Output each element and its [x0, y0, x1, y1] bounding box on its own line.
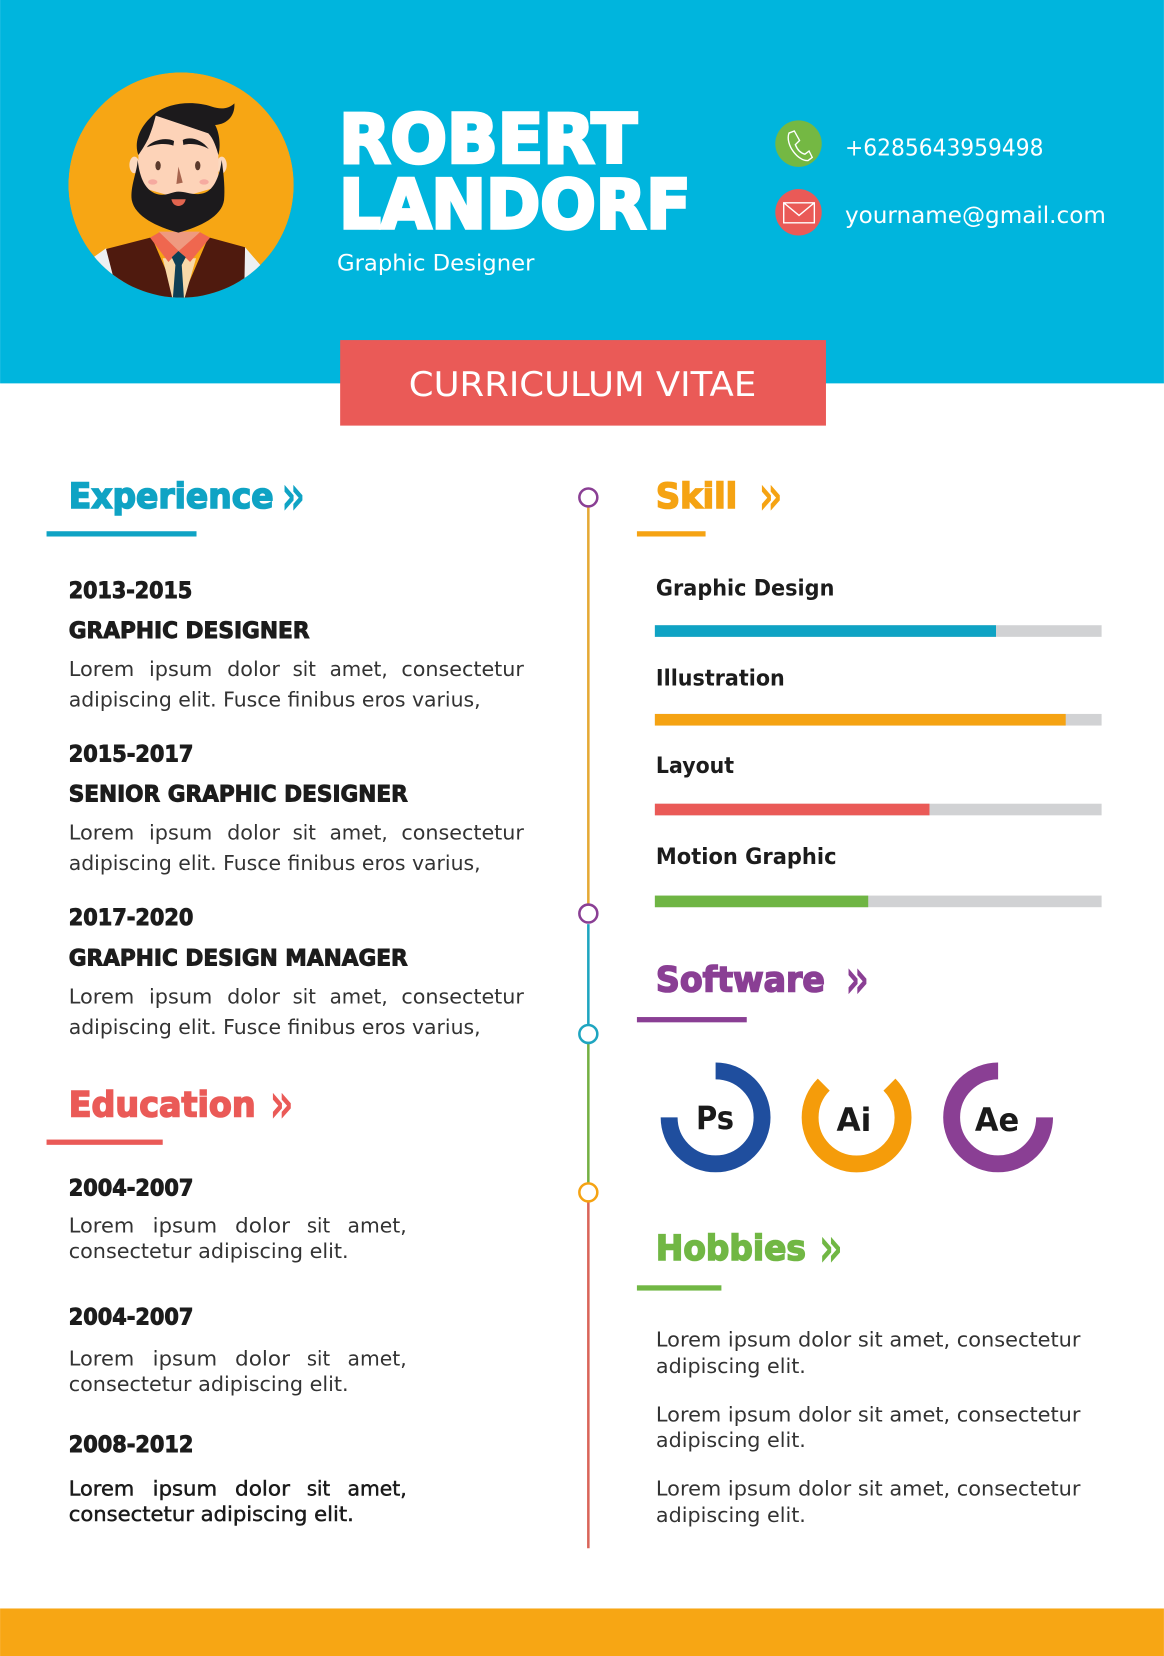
- footer band: [0, 1608, 1164, 1656]
- job title: Graphic Designer: [337, 250, 535, 276]
- skill bar: illustration: Illustration: [656, 665, 785, 691]
- skill bar: illustration: [655, 665, 1102, 726]
- software ring: illustrator: [810, 1085, 903, 1164]
- experience entry 3: sit: [293, 984, 316, 1008]
- heading: hobbies: [637, 1214, 843, 1291]
- skill bar: motion graphic: Motion Graphic: [656, 844, 837, 870]
- education entry 2: ipsum: [153, 1347, 217, 1371]
- skill bar: motion graphic: [655, 844, 1102, 907]
- education entry 2: consectetur adipiscing elit.: [69, 1372, 349, 1396]
- email address: yourname@gmail.com: [845, 202, 1106, 229]
- timeline: [579, 488, 597, 1548]
- skill bar: graphic design: [655, 576, 1102, 637]
- education entry 1: Lorem: [69, 1213, 134, 1237]
- experience entry 2: [69, 741, 524, 875]
- software ring: photoshop: Ps: [696, 1101, 734, 1137]
- experience entry 2: adipiscing elit. Fusce finibus eros varius,: [69, 851, 481, 875]
- heading: hobbies: »: [819, 1214, 843, 1280]
- heading: software: »: [845, 946, 869, 1012]
- experience entry 1: GRAPHIC DESIGNER: [69, 618, 310, 644]
- heading: education: [47, 1071, 294, 1145]
- experience entry 2: SENIOR GRAPHIC DESIGNER: [69, 782, 408, 808]
- education entry 2: sit: [307, 1347, 330, 1371]
- experience entry 3: adipiscing elit. Fusce finibus eros varius,: [69, 1015, 481, 1039]
- experience entry 1: 2013-2015: [69, 578, 192, 604]
- heading: experience: [47, 462, 305, 537]
- education entry 1: consectetur adipiscing elit.: [69, 1239, 349, 1263]
- education entry 3: 2008-2012: [69, 1432, 193, 1458]
- education entry 3: amet,: [348, 1476, 407, 1500]
- experience entry 2: 2015-2017: [69, 741, 193, 767]
- name: ROBERT: [339, 100, 637, 179]
- education entry 3: Lorem: [69, 1476, 134, 1500]
- experience entry 3: amet,: [330, 984, 388, 1008]
- software ring: after effects: Ae: [975, 1103, 1019, 1139]
- education entry 3: consectetur adipiscing elit.: [69, 1502, 354, 1526]
- experience entry 3: GRAPHIC DESIGN MANAGER: [69, 945, 408, 971]
- heading: education: Education: [69, 1085, 256, 1125]
- name: [339, 100, 691, 244]
- banner: curriculum vitae: [340, 340, 826, 426]
- hobbies text: [656, 1328, 1081, 1527]
- experience entry 2: consectetur: [401, 821, 524, 845]
- hobbies text: Lorem ipsum dolor sit amet, consectetur: [656, 1403, 1081, 1427]
- heading: skill: Skill: [656, 477, 737, 517]
- software ring: photoshop: [669, 1071, 762, 1164]
- skill bar: layout: Layout: [656, 753, 734, 779]
- heading: skill: »: [758, 462, 783, 528]
- banner: curriculum vitae: CURRICULUM VITAE: [409, 365, 756, 404]
- heading: skill: [637, 462, 783, 537]
- avatar portrait: [68, 72, 294, 303]
- experience entry 1: adipiscing elit. Fusce finibus eros varius,: [69, 688, 481, 712]
- experience entry 1: consectetur: [401, 657, 524, 681]
- experience entry 2: dolor: [227, 821, 280, 845]
- hobbies text: Lorem ipsum dolor sit amet, consectetur: [656, 1328, 1081, 1352]
- name: LANDORF: [339, 165, 691, 244]
- experience entry 1: amet,: [330, 657, 388, 681]
- experience entry 1: ipsum: [149, 657, 212, 681]
- education entry 1: [69, 1176, 407, 1263]
- education entry 3: sit: [307, 1476, 330, 1500]
- phone number: +6285643959498: [845, 134, 1044, 161]
- experience entry 2: sit: [293, 821, 316, 845]
- hobbies text: Lorem ipsum dolor sit amet, consectetur: [656, 1476, 1081, 1500]
- heading: experience: »: [281, 462, 305, 528]
- experience entry 3: dolor: [227, 984, 280, 1008]
- experience entry 3: Lorem: [69, 984, 134, 1008]
- experience entry 2: amet,: [330, 821, 388, 845]
- experience entry 1: sit: [293, 657, 316, 681]
- hobbies text: adipiscing elit.: [656, 1503, 806, 1527]
- icon: email: [775, 189, 822, 236]
- experience entry 1: dolor: [227, 657, 280, 681]
- experience entry 3: [69, 905, 524, 1039]
- skill bar: graphic design: Graphic Design: [656, 576, 834, 602]
- skill bar: layout: [655, 753, 1102, 815]
- education entry 2: dolor: [235, 1347, 290, 1371]
- icon: phone: [775, 120, 822, 167]
- heading: education: »: [269, 1071, 294, 1137]
- hobbies text: adipiscing elit.: [656, 1428, 806, 1452]
- experience entry 3: consectetur: [401, 984, 524, 1008]
- experience entry 1: Lorem: [69, 657, 134, 681]
- education entry 1: 2004-2007: [69, 1176, 193, 1202]
- experience entry 2: ipsum: [149, 821, 212, 845]
- experience entry 2: Lorem: [69, 821, 134, 845]
- software ring: after effects: [952, 1071, 1045, 1164]
- heading: hobbies: Hobbies: [656, 1229, 806, 1269]
- heading: experience: Experience: [69, 477, 274, 517]
- header band: [0, 0, 1164, 383]
- heading: software: Software: [656, 961, 825, 1001]
- heading: software: [637, 946, 869, 1022]
- education entry 2: amet,: [348, 1347, 407, 1371]
- education entry 3: dolor: [235, 1476, 290, 1500]
- software ring: illustrator: Ai: [837, 1103, 871, 1139]
- education entry 1: ipsum: [153, 1213, 217, 1237]
- education entry 2: [69, 1304, 407, 1396]
- hobbies text: adipiscing elit.: [656, 1354, 806, 1378]
- education entry 3: [69, 1432, 407, 1526]
- education entry 1: sit: [307, 1213, 330, 1237]
- education entry 2: 2004-2007: [69, 1304, 193, 1330]
- education entry 1: amet,: [348, 1213, 407, 1237]
- experience entry 3: 2017-2020: [69, 905, 193, 931]
- education entry 1: dolor: [235, 1213, 290, 1237]
- experience entry 1: [69, 578, 524, 712]
- education entry 2: Lorem: [69, 1347, 134, 1371]
- education entry 3: ipsum: [153, 1476, 217, 1500]
- experience entry 3: ipsum: [149, 984, 212, 1008]
